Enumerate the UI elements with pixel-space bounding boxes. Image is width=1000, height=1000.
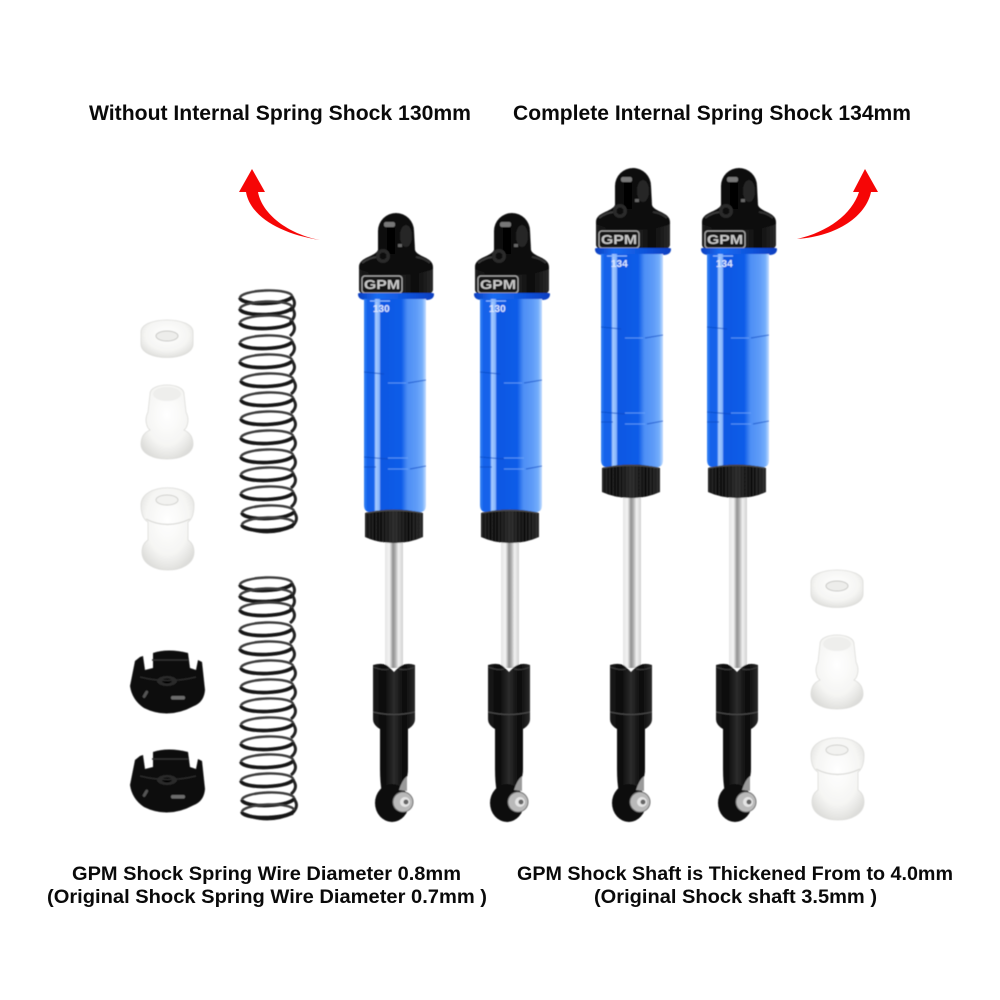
spring: upper — [240, 290, 296, 532]
caption: spring wire diameter: (Original Shock Spring Wire Diameter 0.7mm ) — [47, 887, 487, 908]
caption: shock shaft thickness — [517, 864, 953, 908]
shock shaft — [501, 540, 519, 668]
shock 4: 134mm — [701, 168, 777, 822]
bushing: washer — [141, 320, 193, 358]
caption: spring wire diameter — [47, 864, 487, 908]
shock 1: 130mm — [358, 213, 434, 822]
shock body and cap — [358, 213, 434, 543]
arrow: left red curved arrow — [239, 169, 320, 240]
title: complete internal spring shock: Complete Internal Spring Shock 134mm — [513, 102, 911, 125]
caption: shock shaft thickness: GPM Shock Shaft is Thickened From to 4.0mm — [517, 864, 953, 885]
bushing: stepped — [811, 635, 863, 709]
length mark: 130 — [489, 304, 506, 315]
shock lower mount — [716, 664, 758, 822]
retainer: upper — [130, 650, 205, 714]
shock lower mount — [488, 664, 530, 822]
arrow: right red curved arrow — [797, 169, 878, 239]
length mark: 130 — [373, 304, 390, 315]
right white bushings — [811, 570, 864, 820]
retainer: lower — [130, 750, 205, 813]
bushing: spool — [141, 488, 194, 570]
caption: spring wire diameter: GPM Shock Spring Wire Diameter 0.8mm — [72, 864, 461, 885]
bushing: stepped — [141, 385, 193, 459]
shock lower mount — [373, 664, 415, 822]
shock shaft — [385, 540, 403, 668]
spring: lower — [240, 577, 296, 819]
length mark: 134 — [611, 259, 628, 270]
left white bushings — [141, 320, 194, 570]
bushing: washer — [811, 570, 863, 608]
caption: shock shaft thickness: (Original Shock shaft 3.5mm ) — [594, 887, 877, 908]
length mark: 134 — [716, 259, 733, 270]
shock shaft — [623, 495, 641, 668]
shock body and cap — [595, 168, 671, 498]
shock 3: 134mm — [595, 168, 671, 822]
left black retainers — [130, 650, 205, 813]
title: without internal spring shock: Without Internal Spring Shock 130mm — [89, 102, 471, 125]
shock body and cap — [474, 213, 550, 543]
bushing: spool — [811, 738, 864, 820]
shock lower mount — [610, 664, 652, 822]
shock body and cap — [701, 168, 777, 498]
shock 2: 130mm — [474, 213, 550, 822]
shock shaft — [729, 495, 747, 668]
